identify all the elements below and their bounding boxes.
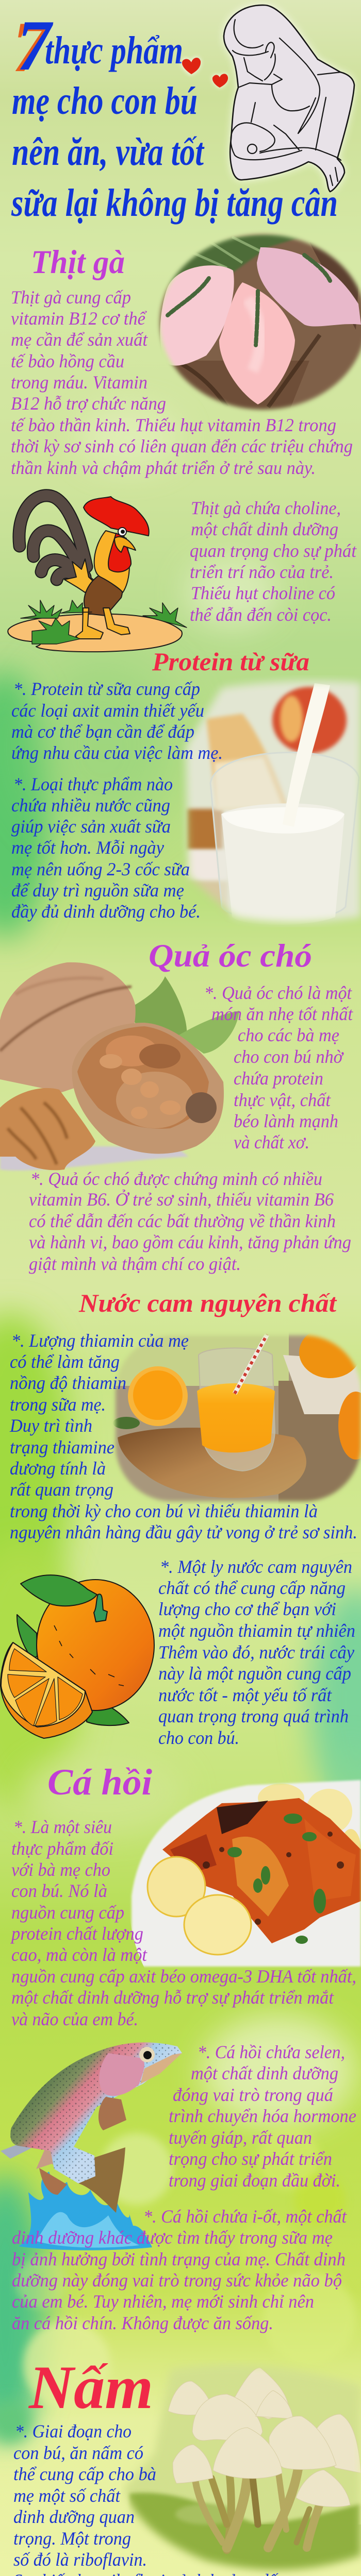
text: vitamin B12: vitamin B12 cơ thể bbox=[11, 308, 147, 329]
text: natural thiamin source: này là một nguồn cung cấp bbox=[158, 1663, 351, 1684]
text: natural thiamin source: một nguồn thiamin tự nhiên bbox=[158, 1620, 355, 1641]
panel: nước cam nguyên chất bbox=[1, 1289, 361, 1748]
text: riboflavin: trọng. Một trong bbox=[13, 2528, 131, 2549]
text: vitamin B6: có thể dẫn đến các bất thường về thần kinh bbox=[29, 1211, 336, 1231]
text: salmon DHA: protein chất lượng bbox=[10, 1923, 143, 1944]
text: choline: một chất dinh dưỡng bbox=[191, 519, 338, 539]
text: iodine: *. Cá hồi chứa i-ốt, một chất bbox=[143, 2206, 347, 2227]
photo: salmon with lemon on white plate bbox=[130, 1778, 361, 1968]
text: iodine: ăn cá hồi chín. Không được ăn sống. bbox=[12, 2313, 273, 2333]
text: riboflavin: thể cung cấp cho bà bbox=[13, 2464, 156, 2484]
panel: quả óc chó bbox=[0, 937, 353, 1274]
title text lines: mẹ cho con bú bbox=[12, 79, 198, 123]
text: salmon DHA: nguồn cung cấp bbox=[11, 1902, 124, 1923]
text: choline: triển trí não của trẻ. bbox=[190, 562, 334, 582]
text: thiamin: trạng thiamine bbox=[10, 1437, 114, 1458]
text: iodine bbox=[12, 2206, 347, 2333]
title block bbox=[11, 6, 338, 225]
panel: cá hồi bbox=[1, 1749, 361, 2333]
text: choline: Thiếu hụt choline có bbox=[191, 583, 335, 603]
text: selenium: *. Cá hồi chứa selen, bbox=[198, 2042, 345, 2062]
illustration: orange with slice and leaves bbox=[1, 1575, 154, 1738]
panel: nấm bbox=[0, 2353, 361, 2576]
text: riboflavin: mẹ một số chất bbox=[13, 2485, 121, 2506]
text: riboflavin bbox=[13, 2421, 356, 2576]
text: natural thiamin source: cho con bú. bbox=[158, 1727, 239, 1748]
text: selenium bbox=[169, 2042, 356, 2191]
text: thiamin: có thể làm tăng bbox=[10, 1351, 120, 1372]
text: selenium: đóng vai trò trong quá bbox=[173, 2084, 333, 2105]
text: plant protein bbox=[204, 982, 353, 1153]
text: vitamin B6 bbox=[29, 1168, 351, 1274]
text: milk protein: mẹ nên uống 2-3 cốc sữa bbox=[11, 859, 190, 879]
text: selenium: trong giai đoạn đầu đời. bbox=[169, 2170, 340, 2191]
text: choline bbox=[190, 498, 357, 625]
text: choline: quan trọng cho sự phát bbox=[190, 540, 357, 561]
text: thiamin bbox=[9, 1330, 357, 1543]
title number 7: 7 bbox=[17, 6, 54, 86]
text: thiamin: nồng độ thiamin bbox=[10, 1372, 126, 1393]
text: selenium: trọng cho sự phát triển bbox=[169, 2148, 332, 2169]
text: selenium: tuyến giáp, rất quan bbox=[169, 2127, 312, 2148]
text: vitamin B12: tế bào hồng cầu bbox=[11, 351, 124, 371]
text: vitamin B12: thần kinh và chậm phát triển ở trẻ sau này. bbox=[11, 457, 316, 478]
text: thiamin: Duy trì tình bbox=[9, 1415, 92, 1436]
heading: Quả óc chó: Quả óc chó bbox=[149, 937, 312, 974]
text: salmon DHA: cao, mà còn là một bbox=[11, 1944, 147, 1965]
text: natural thiamin source: *. Một ly nước cam nguyên bbox=[160, 1556, 352, 1577]
text: milk protein: để duy trì nguồn sữa mẹ bbox=[11, 880, 184, 901]
text: riboflavin: số đó là riboflavin. bbox=[13, 2549, 147, 2570]
heading: Cá hồi: Cá hồi bbox=[47, 1761, 152, 1803]
text: thiamin: trong thời kỳ cho con bú vì thiếu thiamin là bbox=[10, 1501, 318, 1521]
text: vitamin B6: và hành vi, bao gồm cáu kỉnh, tăng phản ứng bbox=[29, 1232, 351, 1252]
heading: Protein từ sữa: Protein từ sữa bbox=[152, 647, 309, 676]
photo: milk poured into glass bbox=[175, 675, 361, 927]
text: thiamin: trong sữa mẹ. bbox=[10, 1394, 106, 1415]
text: salmon DHA: với bà mẹ cho bbox=[11, 1859, 110, 1880]
heading: Nước cam nguyên chất: Nước cam nguyên chất bbox=[78, 1289, 337, 1317]
text: milk protein: mà cơ thể bạn cần để đáp bbox=[11, 721, 194, 742]
text: milk protein: đầy đủ dinh dưỡng cho bé. bbox=[11, 901, 201, 922]
panel: protein từ sữa bbox=[11, 647, 361, 927]
text: vitamin B12: thời kỳ sơ sinh có liên quan đến các triệu chứng bbox=[11, 436, 353, 456]
text: milk protein: *. Loại thực phẩm nào bbox=[13, 774, 173, 794]
text: vitamin B6: vitamin B6. Ở trẻ sơ sinh, thiếu vitamin B6 bbox=[29, 1189, 334, 1210]
text: milk protein: giúp việc sản xuất sữa bbox=[11, 816, 171, 837]
title text lines bbox=[11, 29, 338, 225]
text: vitamin B12: mẹ cần để sản xuất bbox=[11, 329, 148, 350]
text: riboflavin: con bú, ăn nấm có bbox=[13, 2443, 143, 2463]
text: iodine: của em bé. Tuy nhiên, mẹ mới sinh chỉ nên bbox=[12, 2291, 314, 2312]
text: natural thiamin source: nước tốt - một yếu tố rất bbox=[158, 1685, 332, 1705]
text: vitamin B12: tế bào thần kinh. Thiếu hụt vitamin B12 trong bbox=[11, 415, 336, 435]
text: salmon DHA: thực phẩm đối bbox=[11, 1838, 113, 1859]
text: salmon DHA: và não của em bé. bbox=[11, 2009, 138, 2029]
text: plant protein: cho các bà mẹ bbox=[238, 1025, 339, 1045]
title text lines: nên ăn, vừa tốt bbox=[12, 130, 205, 174]
text: choline: thể dẫn đến còi cọc. bbox=[190, 604, 332, 625]
illustration: rooster bbox=[8, 496, 187, 652]
text: plant protein: thực vật, chất bbox=[234, 1090, 331, 1110]
text: vitamin B12 bbox=[11, 287, 353, 478]
text: thiamin: dương tính là bbox=[10, 1458, 106, 1479]
photo: walnuts and leaves bbox=[0, 962, 239, 1171]
text: milk protein bbox=[11, 679, 223, 922]
text: selenium: một chất dinh dưỡng bbox=[191, 2063, 338, 2083]
text: milk protein: *. Protein từ sữa cung cấp bbox=[13, 679, 200, 699]
text: plant protein: cho con bú nhờ bbox=[234, 1046, 344, 1067]
photo: orange juice on wooden board bbox=[111, 1327, 361, 1504]
panel: thịt gà bbox=[8, 229, 361, 652]
text: iodine: dinh dưỡng khác được tìm thấy trong sữa mẹ bbox=[12, 2227, 333, 2248]
text: choline: Thịt gà chứa choline, bbox=[191, 498, 341, 518]
text: riboflavin: dinh dưỡng quan bbox=[13, 2506, 135, 2527]
text: thiamin: rất quan trọng bbox=[10, 1479, 113, 1500]
text: vitamin B6: *. Quả óc chó được chứng minh có nhiều bbox=[30, 1168, 322, 1189]
text: vitamin B12: trong máu. Vitamin bbox=[11, 372, 147, 393]
illustration: mother breastfeeding bbox=[224, 5, 354, 192]
text: natural thiamin source: Thêm vào đó, nước trái cây bbox=[158, 1642, 354, 1663]
heading: Nấm: Nấm bbox=[28, 2353, 153, 2421]
text: plant protein: chứa protein bbox=[234, 1068, 323, 1089]
photo: cream mushrooms on moss bbox=[121, 2360, 361, 2576]
text: riboflavin: *. Giai đoạn cho bbox=[15, 2421, 132, 2442]
text: plant protein: *. Quả óc chó là một bbox=[204, 982, 352, 1003]
text: vitamin B12: B12 hỗ trợ chức năng bbox=[11, 393, 166, 414]
text: natural thiamin source bbox=[158, 1556, 355, 1748]
text: vitamin B12: Thịt gà cung cấp bbox=[11, 287, 131, 308]
text: natural thiamin source: chất có thể cung cấp năng bbox=[158, 1578, 346, 1598]
title number 7: 7 bbox=[12, 7, 50, 87]
text: iodine: dưỡng này đóng vai trò trong sức khỏe não bộ bbox=[12, 2270, 342, 2291]
text: milk protein: chứa nhiều nước cũng bbox=[11, 795, 170, 816]
text: salmon DHA bbox=[10, 1817, 356, 2029]
title text lines: thực phẩm bbox=[45, 29, 183, 72]
text: salmon DHA: một chất dinh dưỡng hỗ trợ sự phát triển mắt bbox=[11, 1987, 334, 2008]
text: milk protein: ứng nhu cầu của việc làm mẹ. bbox=[11, 742, 223, 763]
text: salmon DHA: *. Là một siêu bbox=[13, 1817, 112, 1837]
icon: hearts bbox=[181, 57, 228, 88]
photo: chicken breasts on wooden board bbox=[155, 229, 361, 415]
illustration: leaping trout and water splash bbox=[1, 2042, 182, 2250]
text: selenium: trình chuyển hóa hormone bbox=[169, 2106, 356, 2126]
text: natural thiamin source: quan trọng trong quá trình bbox=[158, 1706, 349, 1726]
text: plant protein: và chất xơ. bbox=[234, 1132, 309, 1153]
text: plant protein: món ăn nhẹ tốt nhất bbox=[211, 1004, 353, 1024]
text: vitamin B6: giật mình và thậm chí co giật. bbox=[29, 1253, 241, 1274]
text: iodine: bị ảnh hưởng bởi tình trạng của mẹ. Chất dinh bbox=[12, 2249, 346, 2269]
text: thiamin: *. Lượng thiamin của mẹ bbox=[11, 1330, 189, 1351]
text: milk protein: các loại axit amin thiết yếu bbox=[11, 700, 204, 721]
text: plant protein: béo lành mạnh bbox=[234, 1111, 338, 1131]
text: milk protein: mẹ tốt hơn. Mỗi ngày bbox=[11, 837, 164, 858]
heading: Thịt gà: Thịt gà bbox=[31, 244, 125, 281]
text: natural thiamin source: lượng cho cơ thể bạn với bbox=[158, 1599, 336, 1619]
text: salmon DHA: con bú. Nó là bbox=[11, 1880, 107, 1901]
